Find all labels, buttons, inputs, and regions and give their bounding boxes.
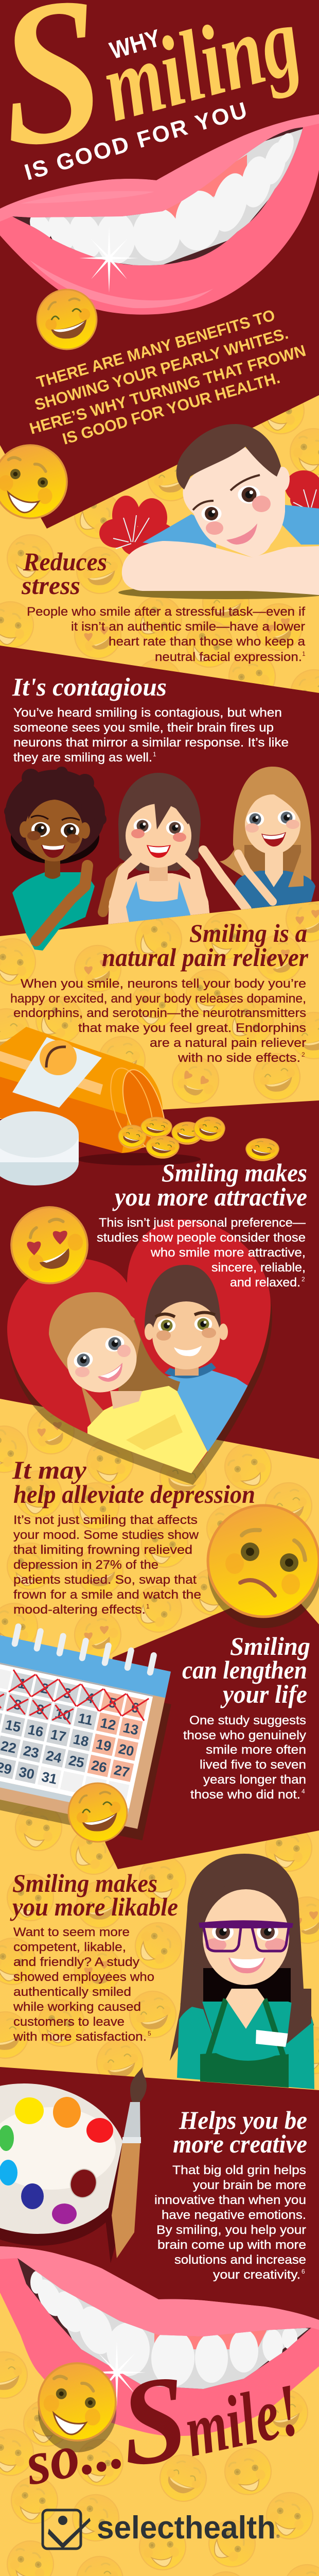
illustration: calendar with crossed-off days: 8: [12, 1697, 23, 1713]
emoji: smiling face: [0, 445, 67, 518]
heading: Helps you be more creative: more creative: [173, 2129, 307, 2158]
illustration: spilled emoji pills: [113, 1112, 286, 1163]
illustration: calendar with crossed-off days: 15: [4, 1717, 22, 1735]
body text: attractive: who smile more attractive,: [150, 1246, 306, 1260]
body text: depression: your mood. Some studies show: [13, 1528, 199, 1542]
illustration: calendar with crossed-off days: 3: [62, 1685, 73, 1702]
body text: likable: authentically smiled: [13, 1985, 131, 1999]
intro text: THERE ARE MANY BENEFITS TO: [34, 306, 277, 392]
illustration: calendar with crossed-off days: 30: [17, 1764, 36, 1782]
body text: likable: while working caused: [13, 2000, 141, 2014]
body text: natural pain reliever: that make you feel great. Endorphins: [78, 1021, 306, 1035]
body text: depression: patients studied. So, swap that: [13, 1573, 197, 1587]
body text: lengthen life: those who genuinely: [183, 1728, 306, 1742]
intro text: [27, 306, 308, 448]
body text: likable: with more satisfaction.: [13, 2030, 147, 2044]
body text: creative: solutions and increase: [174, 2253, 306, 2267]
body text: reduces stress: heart rate than those who keep a: [109, 635, 306, 649]
body text: reduces stress: People who smile after a stressful task—even if: [27, 605, 305, 619]
illustration: paint brush: [105, 2067, 147, 2263]
body text: depression: It’s not just smiling that affects: [13, 1513, 198, 1527]
body text: creative: By smiling, you help your: [156, 2223, 306, 2237]
body text: attractive: studies show people consider those: [97, 1231, 306, 1245]
body text: depression: that limiting frowning relieved: [13, 1543, 192, 1557]
illustration: calendar with crossed-off days: [0, 1611, 181, 1840]
body text: attractive: and relaxed.: [230, 1276, 300, 1290]
illustration: calendar with crossed-off days: 18: [72, 1731, 90, 1750]
illustration: woman pushing up a smile: [108, 773, 211, 927]
body text: lengthen life: One study suggests: [189, 1714, 306, 1727]
illustration: calendar with crossed-off days: 16: [27, 1722, 45, 1740]
body text: contagious: 1: [153, 751, 156, 758]
body text: natural pain reliever: with no side effects.: [178, 1051, 300, 1065]
body text: creative: brain come up with more: [157, 2238, 306, 2252]
body text: lengthen life: those who did not.: [190, 1788, 300, 1802]
body text: lengthen life: 4: [302, 1788, 305, 1795]
heading: Reduces stress: [21, 547, 107, 600]
title: Why Smiling Is Good For You: WHY: [107, 24, 164, 64]
body text: depression: depression in 27% of the: [13, 1558, 158, 1572]
body text: reduces stress: neutral facial expression.: [155, 650, 302, 664]
body text: attractive: This isn’t just personal preference—: [99, 1216, 306, 1230]
heading: Reduces stress: stress: [21, 571, 80, 600]
emoji: heart eyes: [11, 1207, 87, 1283]
illustration: calendar with crossed-off days: 11: [77, 1710, 94, 1728]
illustration: calendar with crossed-off days: 25: [67, 1752, 85, 1771]
body text: contagious: they are smiling as well.: [13, 751, 152, 765]
closing title: so... Smile!: so...: [20, 2412, 129, 2498]
heading: It may help alleviate depression: help alleviate depression: [13, 1480, 255, 1509]
body text: lengthen life: smile more often: [206, 1743, 306, 1757]
illustration: pill bottle with emoji label: [0, 1027, 201, 1185]
heading: Smiling is a natural pain reliever: natural pain reliever: [102, 943, 309, 972]
body text: likable: [13, 1925, 154, 2044]
body text: likable: Want to seem more: [13, 1925, 130, 1939]
heading: Smiling can lengthen your life: [182, 1632, 310, 1708]
body text: creative: 6: [302, 2268, 305, 2275]
body text: creative: That big old grin helps: [172, 2163, 306, 2177]
body text: creative: [154, 2163, 306, 2282]
emoji: laughing face: [37, 290, 97, 349]
body text: contagious: neurons that mirror a similar response. It’s like: [13, 736, 289, 750]
emoji: frowning face: [208, 1505, 319, 1628]
body text: reduces stress: 1: [302, 650, 306, 657]
heading: Smiling makes you more likable: [10, 1869, 178, 1921]
intro text: SHOWING YOUR PEARLY WHITES.: [32, 324, 290, 414]
heading: Smiling makes you more attractive: Smiling makes: [162, 1158, 307, 1187]
illustration: calendar with crossed-off days: 10: [54, 1705, 72, 1724]
intro text: HERE’S WHY TURNING THAT FROWN: [27, 342, 308, 438]
body text: natural pain reliever: endorphins, and serotonin—the neurotransmitters: [13, 1006, 306, 1020]
illustration: calendar with crossed-off days: 1: [16, 1675, 27, 1692]
emoji: laughing face on calendar: [68, 1783, 127, 1842]
heading: It's contagious: It's contagious: [12, 672, 167, 701]
title: Why Smiling Is Good For You: [0, 0, 311, 191]
body text: creative: your brain be more: [193, 2178, 306, 2192]
body text: natural pain reliever: [10, 977, 306, 1065]
body text: likable: customers to leave: [13, 2015, 125, 2029]
illustration: calendar with crossed-off days: 26: [90, 1757, 108, 1775]
illustration: paint palette: [0, 2071, 139, 2258]
heading: Smiling makes you more attractive: you more attractive: [112, 1182, 307, 1211]
body text: creative: have negative emotions.: [162, 2208, 306, 2222]
body text: lengthen life: [183, 1714, 306, 1802]
heading: It may help alleviate depression: [12, 1455, 255, 1509]
body text: natural pain reliever: 2: [302, 1051, 305, 1058]
body text: contagious: You’ve heard smiling is contagious, but when: [13, 706, 282, 720]
illustration: calendar with crossed-off days: 9: [35, 1701, 46, 1718]
heading: Smiling can lengthen your life: your life: [220, 1680, 307, 1708]
illustration: closing smiling mouth: [0, 2246, 319, 2436]
body text: likable: competent, likable,: [13, 1940, 126, 1954]
body text: creative: innovative than when you: [154, 2193, 306, 2207]
logo: SelectHealth: ®: [276, 2534, 280, 2539]
illustration: smiling employee with glasses: [170, 1854, 314, 2089]
heading: Smiling can lengthen your life: can lengthen: [182, 1655, 307, 1684]
illustration: woman relaxing with flowers: [99, 424, 319, 599]
heading: Smiling makes you more attractive: [112, 1158, 307, 1211]
heading: Smiling is a natural pain reliever: [102, 919, 309, 972]
body text: depression: 1: [146, 1603, 150, 1610]
body text: depression: [13, 1513, 201, 1617]
heading: Helps you be more creative: Helps you be: [179, 2106, 307, 2134]
heading: Smiling can lengthen your life: Smiling: [230, 1632, 310, 1660]
body text: depression: frown for a smile and watch the: [13, 1588, 201, 1602]
illustration: couple in a heart: [0, 1216, 278, 1485]
body text: reduces stress: [27, 605, 306, 664]
heading: Smiling is a natural pain reliever: Smiling is a: [189, 919, 307, 947]
body text: attractive: sincere, reliable,: [211, 1261, 306, 1275]
heading: Smiling makes you more likable: Smiling makes: [12, 1869, 157, 1897]
illustration: calendar with crossed-off days: 20: [117, 1741, 135, 1759]
body text: creative: your creativity.: [213, 2268, 300, 2282]
illustration: calendar with crossed-off days: 23: [22, 1743, 40, 1761]
body text: likable: 5: [148, 2030, 151, 2037]
illustration: big smiling mouth: [0, 114, 319, 315]
heading: Reduces stress: Reduces: [23, 547, 107, 576]
body text: lengthen life: years longer than: [203, 1773, 306, 1787]
logo: SelectHealth: selecthealth: [97, 2510, 276, 2546]
illustration: calendar with crossed-off days: 5: [107, 1694, 118, 1711]
illustration: calendar with crossed-off days: 27: [113, 1762, 131, 1781]
body text: likable: showed employees who: [13, 1970, 154, 1984]
body text: natural pain reliever: happy or excited, and your body releases dopamine,: [10, 992, 306, 1006]
body text: contagious: [13, 706, 289, 765]
illustration: calendar with crossed-off days: 17: [49, 1726, 67, 1745]
illustration: woman with afro pointing: [4, 767, 123, 951]
illustration: calendar with crossed-off days: 13: [121, 1720, 140, 1738]
illustration: calendar with crossed-off days: 2: [39, 1680, 50, 1697]
heading: Smiling makes you more likable: you more likable: [10, 1892, 178, 1921]
title: Why Smiling Is Good For You: IS GOOD FOR YOU: [22, 97, 250, 185]
heading: Helps you be more creative: [173, 2106, 307, 2158]
emoji: closing smiling face: [38, 2363, 116, 2452]
body text: natural pain reliever: are a natural pain reliever: [150, 1036, 306, 1050]
body text: reduces stress: it isn’t an authentic smile—have a lower: [71, 620, 305, 634]
body text: depression: mood-altering effects.: [13, 1603, 146, 1617]
illustration: calendar with crossed-off days: 19: [95, 1736, 113, 1754]
body text: attractive: 2: [302, 1276, 305, 1283]
illustration: calendar with crossed-off days: 24: [45, 1748, 63, 1766]
illustration: calendar with crossed-off days: 31: [40, 1769, 59, 1787]
closing title: so... Smile!: [20, 2349, 307, 2498]
illustration: calendar with crossed-off days: 12: [99, 1715, 117, 1733]
body text: lengthen life: lived five to seven: [200, 1758, 306, 1772]
body text: attractive: [97, 1216, 306, 1290]
illustration: calendar with crossed-off days: 4: [84, 1690, 95, 1706]
closing title: so... Smile!: S: [115, 2349, 193, 2492]
illustration: calendar with crossed-off days: 6: [130, 1700, 140, 1716]
intro text: IS GOOD FOR YOUR HEALTH.: [60, 368, 282, 448]
heading: It may help alleviate depression: It may: [12, 1455, 87, 1484]
body text: contagious: someone sees you smile, their brain fires up: [13, 721, 274, 735]
illustration: blonde woman pointing: [203, 767, 315, 911]
body text: likable: and friendly? A study: [13, 1955, 139, 1969]
body text: natural pain reliever: When you smile, neurons tell your body you’re: [21, 977, 306, 991]
